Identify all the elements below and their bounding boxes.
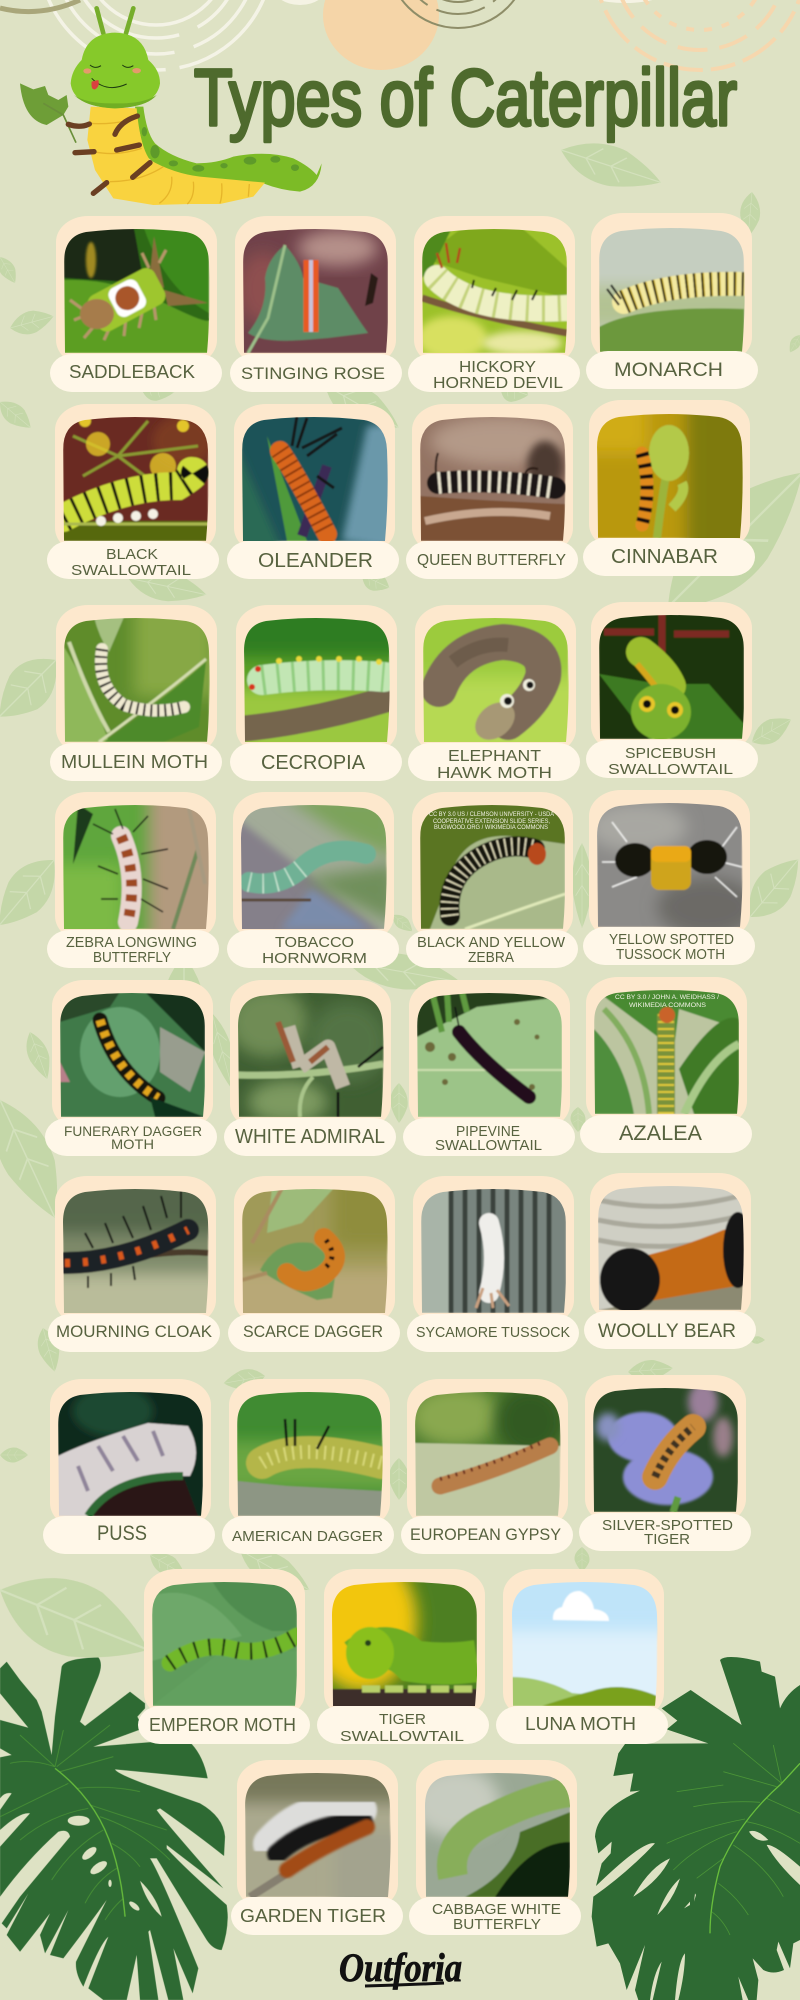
label: funerary dagger moth: FUNERARY DAGGER <box>64 1123 202 1139</box>
photo: azalea <box>594 989 739 1114</box>
label: hickory horned devil: HORNED DEVIL <box>433 375 563 392</box>
card: cinnabar <box>577 393 762 576</box>
text: photo credit: COOPERATIVE EXTENSION SLIDE SERIES, <box>433 819 550 825</box>
photo: cinnabar <box>597 414 743 538</box>
photo: woolly bear <box>598 1185 753 1312</box>
photo: mullein moth <box>64 618 210 742</box>
card: sycamore tussock <box>407 1176 579 1352</box>
label: elephant hawk moth: HAWK MOTH <box>437 765 552 782</box>
label: puss <box>43 1516 215 1554</box>
label: pipevine swallowtail: SWALLOWTAIL <box>435 1138 542 1154</box>
label: stinging rose: STINGING ROSE <box>241 364 385 383</box>
label: white admiral: WHITE ADMIRAL <box>235 1126 385 1148</box>
label: mourning cloak <box>48 1314 220 1352</box>
text: photo credit: CC BY 3.0 US / CLEMSON UNIVERSITY - USDA <box>429 812 554 818</box>
text: photo credit: BUGWOOD.ORG / WIKIMEDIA COMMONS <box>434 825 548 831</box>
label: mullein moth: MULLEIN MOTH <box>61 752 208 772</box>
text: photo credit: CC BY 3.0 / JOHN A. WEIDHASS / <box>615 995 719 1001</box>
label: tiger swallowtail <box>317 1706 489 1745</box>
card: zebra longwing butterfly <box>43 784 228 968</box>
photo: elephant hawk moth <box>423 618 569 742</box>
card: azalea <box>580 977 752 1153</box>
label: pipevine swallowtail: PIPEVINE <box>456 1124 520 1140</box>
mascot head <box>71 33 160 108</box>
decoration: top circles and arcs <box>0 0 800 70</box>
photo: pipevine swallowtail <box>417 992 562 1117</box>
label: emperor moth <box>138 1706 310 1744</box>
label: oleander: OLEANDER <box>258 550 373 572</box>
card: cecropia <box>230 605 402 781</box>
label: cabbage white butterfly <box>409 1897 581 1935</box>
photo: saddleback <box>64 228 209 353</box>
label: yellow spotted tussock moth: TUSSOCK MOTH <box>616 947 725 963</box>
card: white admiral <box>224 980 396 1156</box>
photo: stinging rose <box>238 228 388 353</box>
card: oleander <box>227 404 402 579</box>
photo: scarce dagger <box>222 1168 407 1328</box>
label: puss: PUSS <box>97 1522 147 1545</box>
label: spicebush swallowtail: SPICEBUSH <box>625 745 716 762</box>
photo: black swallowtail <box>63 415 213 541</box>
monstera leaf right <box>592 1657 800 2000</box>
photo: tiger swallowtail <box>307 1551 477 1709</box>
label: tobacco hornworm <box>227 930 399 968</box>
logo: Outforia: Outforia <box>339 1945 462 1990</box>
photo: mourning cloak <box>43 1168 228 1328</box>
monstera leaf left <box>0 1657 228 2000</box>
card: tiger swallowtail <box>307 1551 489 1745</box>
card: mourning cloak <box>43 1168 228 1352</box>
label: queen butterfly <box>406 541 578 579</box>
card: emperor moth <box>138 1569 310 1744</box>
card: yellow spotted tussock moth <box>583 790 757 965</box>
label: scarce dagger: SCARCE DAGGER <box>243 1322 383 1341</box>
card: scarce dagger <box>222 1168 407 1352</box>
label: elephant hawk moth <box>408 743 580 782</box>
label: saddleback <box>50 354 222 392</box>
label: woolly bear: WOOLLY BEAR <box>598 1321 736 1342</box>
label: cabbage white butterfly: BUTTERFLY <box>453 1916 541 1933</box>
label: tiger swallowtail: SWALLOWTAIL <box>340 1728 464 1745</box>
photo: silver-spotted tiger <box>593 1382 738 1512</box>
photo: european gypsy <box>410 1386 565 1516</box>
text: photo credit <box>429 812 554 831</box>
photo: monarch <box>599 228 745 352</box>
label: luna moth: LUNA MOTH <box>525 1714 636 1734</box>
photo: zebra longwing butterfly <box>63 805 209 929</box>
photo: cecropia <box>244 618 390 742</box>
card: silver-spotted tiger <box>579 1375 751 1551</box>
photo: sycamore tussock <box>421 1188 566 1313</box>
label: monarch <box>586 351 758 389</box>
card: queen butterfly <box>406 404 578 579</box>
card: pipevine swallowtail <box>403 980 575 1156</box>
decoration: faded background leaves <box>0 131 800 1685</box>
label: european gypsy: EUROPEAN GYPSY <box>410 1525 561 1544</box>
label: cecropia <box>230 743 402 781</box>
card: garden tiger <box>225 1752 410 1935</box>
card: black and yellow zebra <box>406 792 578 968</box>
card: luna moth <box>492 1561 677 1744</box>
photo: cabbage white butterfly <box>410 1767 570 1897</box>
card: spicebush swallowtail <box>586 602 758 778</box>
label: american dagger <box>222 1516 394 1554</box>
label: monarch: MONARCH <box>614 360 723 381</box>
label: woolly bear <box>584 1311 756 1349</box>
label: white admiral <box>224 1118 396 1156</box>
card: stinging rose <box>230 216 402 392</box>
label: hickory horned devil: HICKORY <box>459 359 536 376</box>
photo: hickory horned devil <box>417 228 567 360</box>
card: monarch <box>579 213 764 389</box>
label: luna moth <box>496 1706 668 1744</box>
label: oleander <box>227 541 399 579</box>
label: zebra longwing butterfly: BUTTERFLY <box>93 950 171 966</box>
label: cabbage white butterfly: CABBAGE WHITE <box>432 1901 561 1918</box>
label: spicebush swallowtail: SWALLOWTAIL <box>608 761 733 778</box>
photo: tobacco hornworm <box>241 805 387 929</box>
label: azalea <box>580 1115 752 1153</box>
photo: oleander <box>242 417 388 541</box>
label: scarce dagger <box>228 1314 400 1352</box>
photo: yellow spotted tussock moth <box>597 803 742 927</box>
label: cinnabar: CINNABAR <box>611 546 718 568</box>
photo: spicebush swallowtail <box>599 614 744 740</box>
label: queen butterfly: QUEEN BUTTERFLY <box>417 552 566 569</box>
card: mullein moth <box>50 597 222 781</box>
photo: white admiral <box>238 993 384 1117</box>
card: hickory horned devil <box>408 216 580 392</box>
label: emperor moth: EMPEROR MOTH <box>149 1715 296 1735</box>
label: american dagger: AMERICAN DAGGER <box>232 1528 383 1545</box>
label: garden tiger: GARDEN TIGER <box>240 1905 386 1926</box>
label: saddleback: SADDLEBACK <box>69 362 195 382</box>
label: european gypsy <box>401 1516 573 1554</box>
label: sycamore tussock: SYCAMORE TUSSOCK <box>416 1324 570 1341</box>
label: spicebush swallowtail <box>586 740 758 778</box>
label: funerary dagger moth <box>45 1118 217 1156</box>
label: tiger swallowtail: TIGER <box>379 1711 426 1728</box>
photo: emperor moth <box>152 1581 297 1706</box>
photo: puss <box>58 1386 203 1516</box>
photo: funerary dagger moth <box>60 992 205 1117</box>
card: tobacco hornworm <box>227 792 399 968</box>
label: black and yellow zebra <box>406 930 578 968</box>
label: mourning cloak: MOURNING CLOAK <box>56 1322 213 1341</box>
mascot leaf <box>20 83 76 143</box>
label: funerary dagger moth: MOTH <box>111 1136 154 1152</box>
label: hickory horned devil <box>408 354 580 392</box>
label: yellow spotted tussock moth: YELLOW SPOTTED <box>609 932 734 948</box>
photo: luna moth placeholder sky <box>492 1561 677 1706</box>
label: black and yellow zebra: BLACK AND YELLOW <box>417 934 566 951</box>
label: pipevine swallowtail <box>403 1118 575 1156</box>
label: black swallowtail: SWALLOWTAIL <box>71 562 191 579</box>
label: black and yellow zebra: ZEBRA <box>468 949 514 966</box>
label: tobacco hornworm: HORNWORM <box>262 950 367 967</box>
label: mullein moth <box>50 743 222 781</box>
label: black swallowtail <box>47 541 219 579</box>
card: saddleback <box>50 216 222 392</box>
label: cinnabar <box>583 538 755 576</box>
label: silver-spotted tiger: TIGER <box>644 1532 690 1548</box>
label: garden tiger <box>231 1897 403 1935</box>
label: tobacco hornworm: TOBACCO <box>275 934 354 951</box>
photo: american dagger <box>217 1391 402 1516</box>
label: yellow spotted tussock moth <box>583 927 755 965</box>
text: photo credit <box>615 995 719 1009</box>
card: puss <box>43 1379 215 1554</box>
photo: queen butterfly <box>420 416 570 541</box>
label: stinging rose <box>230 354 402 392</box>
label: silver-spotted tiger: SILVER-SPOTTED <box>602 1518 733 1534</box>
label: azalea: AZALEA <box>619 1122 702 1145</box>
card: black swallowtail <box>47 404 219 579</box>
card: woolly bear <box>584 1173 756 1349</box>
text: photo credit: WIKIMEDIA COMMONS <box>629 1003 706 1009</box>
label: black swallowtail: BLACK <box>106 546 158 563</box>
label: sycamore tussock <box>407 1314 579 1352</box>
photo: garden tiger <box>225 1752 410 1912</box>
label: silver-spotted tiger <box>579 1513 751 1551</box>
label: zebra longwing butterfly: ZEBRA LONGWING <box>66 935 197 951</box>
label: zebra longwing butterfly <box>47 930 219 968</box>
card: american dagger <box>217 1379 402 1554</box>
label: cecropia: CECROPIA <box>261 752 366 774</box>
card: funerary dagger moth <box>45 980 217 1156</box>
card: cabbage white butterfly <box>409 1760 581 1935</box>
label: elephant hawk moth: ELEPHANT <box>448 748 542 765</box>
card: european gypsy <box>401 1379 573 1554</box>
photo: black and yellow zebra <box>420 804 565 929</box>
icon: cartoon caterpillar mascot holding a leaf <box>20 8 322 205</box>
card: elephant hawk moth <box>403 605 588 782</box>
